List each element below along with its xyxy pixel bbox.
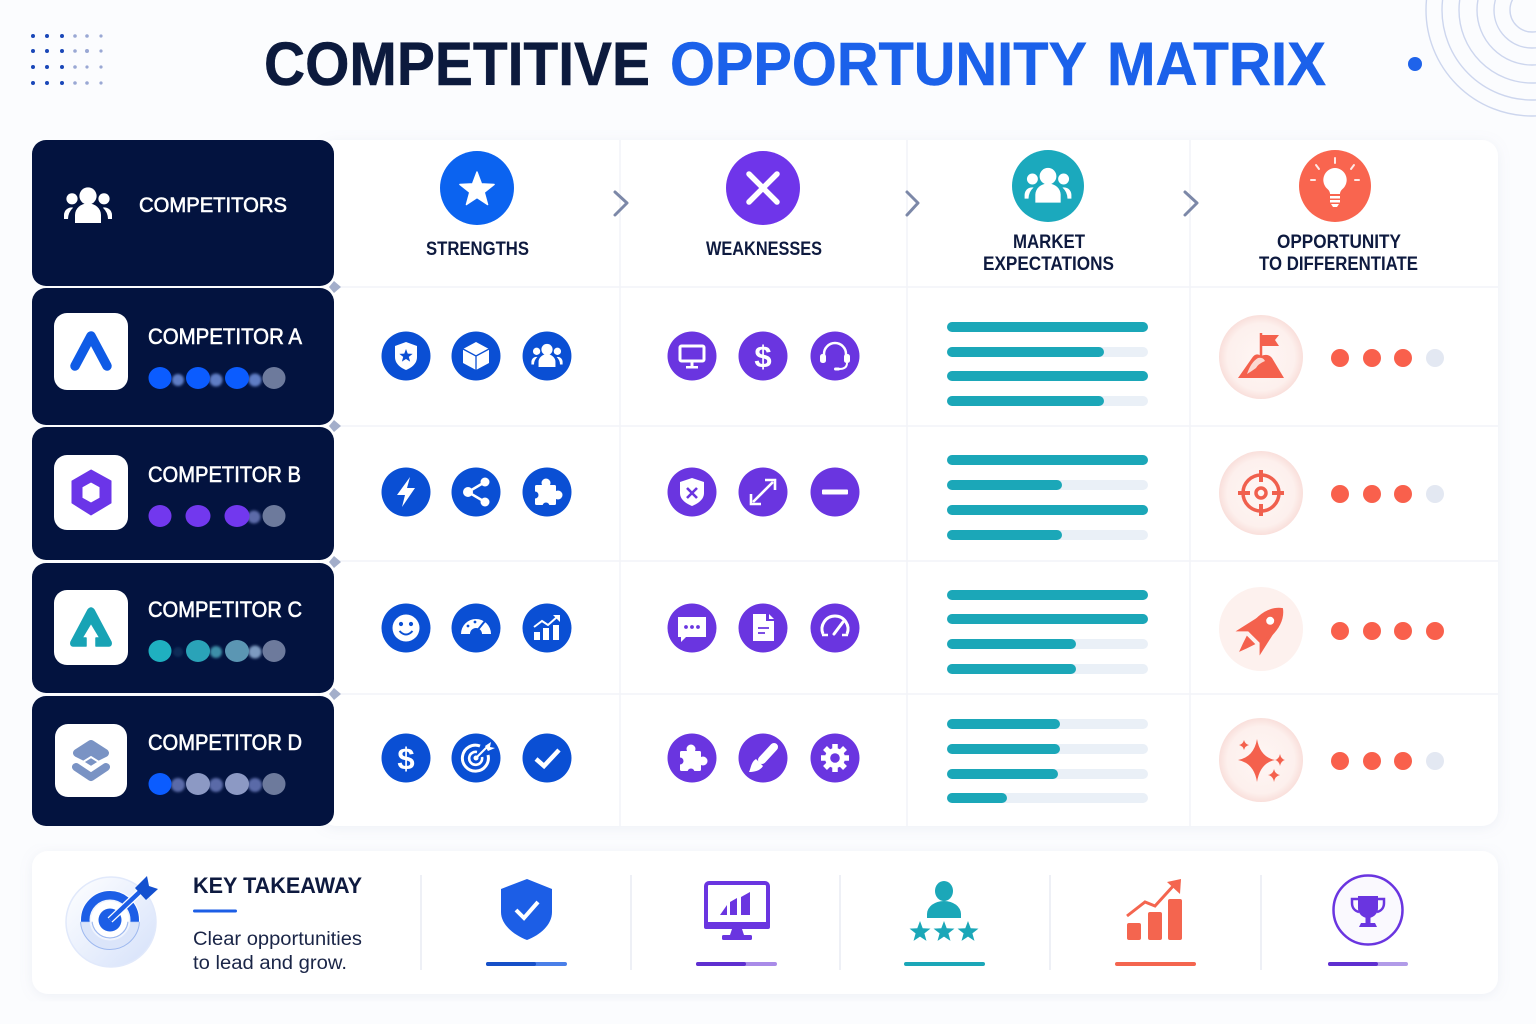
heading: competitors: COMPETITORS (139, 194, 287, 217)
logo: competitor A (54, 313, 128, 390)
icon: speedometer (810, 604, 860, 652)
icon: trophy (1328, 876, 1408, 966)
icon: target with arrow (66, 876, 158, 967)
panel: competitor B (32, 427, 334, 560)
column header: opportunity to differentiate: OPPORTUNITY (1277, 232, 1401, 253)
opportunity: competitor A mountain flag (1219, 315, 1303, 399)
icon: dollar: $ (397, 741, 415, 776)
column header: market expectations: EXPECTATIONS (983, 254, 1114, 275)
bar chart: competitor D market expectations (947, 719, 1148, 803)
arrow: weaknesses to market expectations (907, 192, 918, 215)
weaknesses icons: competitor B (668, 468, 860, 516)
panel: key takeaway (32, 851, 1498, 994)
text: takeaway description: Clear opportunities (193, 929, 362, 950)
icon: monitor chart (696, 883, 777, 966)
icon: shield check (486, 879, 567, 966)
bar chart: competitor C market expectations (947, 590, 1148, 674)
strengths icons: competitor C (382, 604, 572, 652)
panel: competitors header (32, 140, 334, 286)
opportunity: competitor D sparkles (1219, 718, 1303, 802)
icon: group (523, 332, 571, 380)
label: competitor C: COMPETITOR C (148, 597, 302, 622)
icon: document (738, 604, 788, 652)
strengths icons: competitor D (382, 734, 572, 782)
column header: strengths (426, 151, 529, 260)
rating dots: competitor D (148, 773, 286, 795)
rating dots: competitor A opportunity (1331, 349, 1444, 367)
title: OPPORTUNITY (670, 30, 1087, 98)
title: MATRIX (1107, 30, 1326, 98)
icon: share (452, 468, 500, 516)
weaknesses icons: competitor D (668, 734, 860, 782)
logo: competitor B (54, 455, 128, 530)
label: competitor B: COMPETITOR B (148, 462, 301, 487)
bar chart: competitor A market expectations (947, 322, 1148, 406)
icon: target (452, 734, 500, 782)
decorative concentric rings (1426, 0, 1536, 116)
logo: competitor C (54, 590, 128, 665)
strengths icons: competitor A (382, 332, 571, 380)
icon: shield star (382, 332, 430, 380)
label: competitor D: COMPETITOR D (148, 730, 302, 755)
icon: chat bubble (668, 604, 716, 652)
icon: gauge (452, 604, 500, 652)
column header: weaknesses: WEAKNESSES (706, 239, 822, 260)
panel: competitor C (32, 563, 334, 693)
icon: minus (810, 468, 860, 516)
panel: competitor D (32, 696, 334, 826)
arrow: market expectations to opportunity (1185, 192, 1197, 215)
icon: lightning bolt (382, 468, 430, 516)
weaknesses icons: competitor C (668, 604, 860, 652)
icon: check (522, 734, 572, 782)
column header: opportunity to differentiate: TO DIFFERENTIATE (1259, 254, 1418, 275)
rating dots: competitor C (148, 640, 286, 662)
icon: dollar (738, 332, 788, 380)
weaknesses icons: competitor A (668, 332, 860, 380)
icon: dollar (382, 734, 430, 782)
title: COMPETITIVE (264, 30, 650, 98)
icon: gear (810, 734, 860, 782)
icon: competitors group (64, 187, 112, 223)
label: competitor A: COMPETITOR A (148, 324, 302, 349)
heading: key takeaway: KEY TAKEAWAY (193, 873, 362, 898)
panel: competitor A (32, 288, 334, 425)
strengths icons: competitor B (382, 468, 572, 516)
column header: opportunity to differentiate (1259, 150, 1418, 275)
arrow: strengths to weaknesses (615, 192, 627, 215)
column header: market expectations: MARKET (1013, 232, 1085, 253)
rating dots: competitor B (148, 505, 286, 527)
bar chart: competitor B market expectations (947, 455, 1148, 540)
icon: monitor (668, 332, 716, 380)
icon: smiley (382, 604, 430, 652)
opportunity: competitor B crosshair (1219, 451, 1303, 535)
icon: shield x (668, 468, 716, 516)
icon: growth chart (1115, 879, 1196, 966)
text: takeaway description: to lead and grow. (193, 953, 347, 974)
column header: strengths: STRENGTHS (426, 239, 529, 260)
icon: cube (452, 332, 500, 380)
opportunity: competitor C rocket (1219, 587, 1303, 671)
column header: weaknesses (706, 151, 822, 260)
icon: growth chart (522, 604, 572, 652)
icon: headset (810, 332, 860, 380)
rating dots: competitor C opportunity (1331, 622, 1444, 640)
icon: puzzle (522, 468, 572, 516)
icon: brush (738, 734, 788, 782)
rating dots: competitor A (148, 367, 286, 389)
decorative accent dot (1408, 57, 1422, 71)
icon: dollar: $ (754, 339, 772, 374)
icon: person with stars (904, 881, 985, 966)
text: takeaway description (193, 929, 362, 974)
title (264, 30, 1326, 98)
decorative dot grid (31, 34, 103, 85)
rating dots: competitor D opportunity (1331, 752, 1444, 770)
logo: competitor D (55, 724, 127, 797)
matrix table background (320, 140, 1498, 826)
icon: puzzle (668, 734, 716, 782)
icon: expand arrows (738, 468, 788, 516)
column header: market expectations (983, 150, 1114, 275)
rating dots: competitor B opportunity (1331, 485, 1444, 503)
